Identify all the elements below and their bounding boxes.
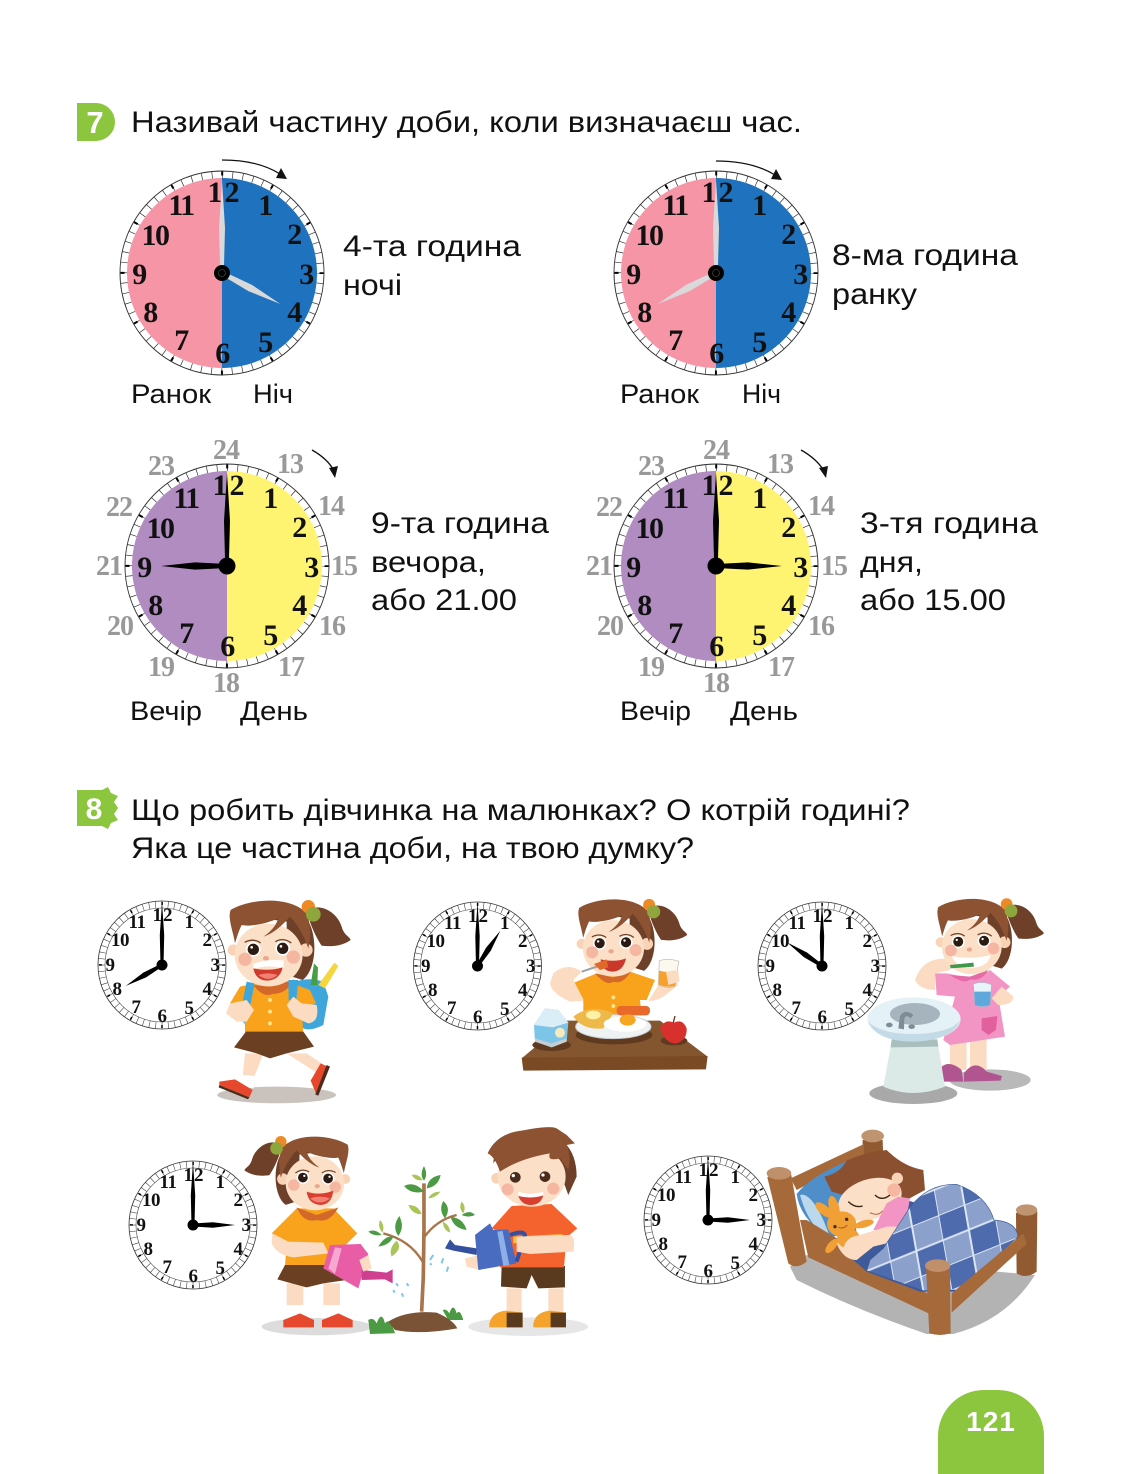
arrow: clockwise 1	[222, 160, 287, 179]
clock: 8 in the morning: 12	[702, 176, 736, 209]
clock: 4 at night: 6	[215, 337, 230, 370]
badge 8: 8	[86, 793, 102, 826]
small clock: 3 o'clock, daytime: 2	[234, 1190, 242, 1211]
labels: evening and day 2: День	[730, 696, 798, 726]
clock: 15 hours: 9	[626, 551, 640, 584]
clock: 15 hours: 21	[586, 551, 612, 582]
small clock: 8 o'clock: 2	[202, 930, 212, 951]
badge 7: 7	[86, 105, 104, 140]
clock: 15 hours: 23	[638, 451, 665, 482]
clock: 15 hours: 22	[596, 492, 622, 523]
illustration: girl sleeping in bed	[767, 1130, 1037, 1335]
small clock: 1 o'clock: 1	[500, 913, 509, 934]
small clock: 10 o'clock: 5	[844, 999, 854, 1020]
clock: 15 hours: 24	[703, 435, 730, 466]
clock: 21 hours: 9	[137, 551, 151, 584]
small clock: 3 o'clock, daytime: 3	[242, 1215, 250, 1236]
clock: 15 hours: 17	[768, 652, 795, 683]
clock: 21 hours	[96, 435, 357, 699]
small clock: 3 o'clock, daytime: 7	[162, 1257, 172, 1278]
small clock: 10 o'clock: 1	[844, 913, 854, 934]
small clock: 3 o'clock, night: 11	[675, 1167, 691, 1188]
small clock: 3 o'clock, daytime: 1	[216, 1172, 224, 1193]
clock: 21 hours: 19	[148, 652, 174, 683]
heading: exercise 8: Яка це частина доби, на твою думку?	[131, 832, 694, 865]
clock: 8 in the morning: 7	[668, 324, 683, 357]
clock: 8 in the morning: 11	[662, 189, 688, 222]
small clock: 1 o'clock: 6	[473, 1007, 482, 1028]
small clock: 8 o'clock: 8	[112, 979, 122, 1000]
clock: 8 in the morning: 4	[781, 296, 796, 329]
clock: 15 hours: 10	[636, 512, 663, 545]
labels: evening and day 2: Вечір	[620, 696, 691, 726]
clock: 15 hours: 19	[638, 652, 664, 683]
small clock: 3 o'clock, night: 9	[652, 1210, 660, 1231]
clock: 21 hours: 14	[318, 491, 345, 522]
small clock: 3 o'clock, daytime: 11	[160, 1172, 176, 1193]
small clock: 8 o'clock	[98, 901, 226, 1029]
small clock: 3 o'clock, daytime: 10	[142, 1190, 160, 1211]
small clock: 3 o'clock, daytime: 5	[216, 1258, 224, 1279]
small clock: 8 o'clock: 3	[210, 955, 220, 976]
arrow: clockwise 3	[312, 450, 338, 478]
labels: evening and day 2	[620, 696, 798, 726]
boy	[507, 1288, 522, 1313]
small clock: 3 o'clock, daytime: 9	[136, 1215, 146, 1236]
clock: 15 hours: 8	[637, 589, 651, 622]
clock: 8 in the morning: 10	[636, 219, 663, 252]
small clock: 10 o'clock: 6	[818, 1007, 826, 1028]
clock: 21 hours: 23	[148, 451, 175, 482]
clock: 15 hours: 4	[781, 589, 796, 622]
bunny toy	[813, 1195, 875, 1257]
small clock: 8 o'clock: 1	[184, 912, 194, 933]
page number tab: 121	[966, 1406, 1016, 1437]
small clock: 3 o'clock, night: 6	[704, 1261, 712, 1282]
small clock: 10 o'clock	[758, 902, 886, 1030]
labels: morning and night 2: Ніч	[742, 379, 781, 409]
clock: 4 at night: 5	[258, 326, 272, 359]
small clock: 8 o'clock: 4	[202, 979, 212, 1000]
clock: 4 at night	[120, 171, 324, 375]
clock: 8 in the morning: 9	[626, 258, 640, 291]
clock: 4 at night: 10	[142, 219, 169, 252]
small clock: 1 o'clock: 3	[526, 956, 535, 977]
clock: 21 hours: 20	[107, 611, 133, 642]
small clock: 8 o'clock: 11	[129, 912, 145, 933]
small clock: 3 o'clock, night: 4	[748, 1234, 758, 1255]
clock: 15 hours: 1	[752, 482, 766, 515]
caption: 3 in the afternoon: або 15.00	[860, 584, 1006, 617]
clock: 8 in the morning	[614, 171, 818, 375]
clock: 15 hours: 15	[821, 551, 847, 582]
girl	[287, 1283, 303, 1307]
small clock: 3 o'clock, night: 7	[678, 1252, 688, 1273]
illustration: girl eating breakfast	[522, 899, 708, 1071]
small clock: 3 o'clock, daytime	[129, 1161, 257, 1289]
pink watering can	[323, 1244, 368, 1288]
arrow: clockwise 2	[716, 161, 782, 180]
tree	[422, 1183, 424, 1312]
small clock: 3 o'clock, night: 2	[748, 1185, 758, 1206]
clock: 21 hours: 4	[292, 589, 307, 622]
small clock: 10 o'clock: 4	[862, 980, 872, 1001]
clock: 15 hours: 7	[668, 617, 683, 650]
clock: 4 at night: 2	[287, 218, 301, 251]
labels: evening and day 1	[130, 696, 308, 726]
heading text 8: Що робить дівчинка на малюнках? О котрій годині?	[131, 794, 910, 827]
clock: 21 hours: 3	[304, 551, 318, 584]
small clock: 3 o'clock, night: 3	[756, 1210, 766, 1231]
small clock: 1 o'clock: 10	[426, 931, 444, 952]
small clock: 1 o'clock: 12	[468, 906, 489, 927]
small clock: 10 o'clock: 10	[771, 931, 789, 952]
clock: 4 at night: 1	[258, 189, 272, 222]
small clock: 1 o'clock: 2	[518, 931, 527, 952]
clock: 21 hours: 5	[263, 619, 277, 652]
clock: 15 hours: 5	[752, 619, 766, 652]
small clock: 10 o'clock: 12	[812, 906, 834, 927]
clock: 21 hours: 11	[173, 482, 199, 515]
clock: 4 at night: 7	[174, 324, 189, 357]
heading: exercise 7	[77, 103, 802, 141]
caption: 8 in the morning: 8-ма година	[832, 239, 1018, 272]
small clock: 1 o'clock: 7	[447, 998, 457, 1019]
clock: 15 hours: 18	[703, 668, 730, 699]
clock: 4 at night: 4	[287, 296, 302, 329]
labels: morning and night 2: Ранок	[620, 379, 699, 409]
clock: 15 hours: 6	[709, 630, 724, 663]
small clock: 1 o'clock: 5	[500, 999, 509, 1020]
caption: 9 in the evening: або 21.00	[371, 584, 517, 617]
small clock: 3 o'clock, night: 10	[657, 1185, 675, 1206]
small clock: 1 o'clock	[414, 902, 542, 1030]
clock: 21 hours: 15	[331, 551, 357, 582]
small clock: 3 o'clock, daytime: 6	[188, 1266, 198, 1287]
small clock: 8 o'clock: 6	[158, 1006, 166, 1027]
heading: exercise 8	[77, 787, 910, 865]
illustration: girl and boy watering a tree	[244, 1127, 588, 1336]
small clock: 10 o'clock: 9	[766, 956, 774, 977]
clock: 15 hours	[586, 435, 847, 699]
clock: 15 hours: 11	[662, 482, 688, 515]
clock: 21 hours: 2	[292, 511, 306, 544]
clock: 21 hours: 6	[220, 630, 235, 663]
arrow: clockwise 4	[801, 450, 828, 478]
small clock: 1 o'clock: 9	[421, 956, 430, 977]
badge 8	[77, 787, 118, 829]
clock: 8 in the morning: 3	[793, 258, 807, 291]
labels: evening and day 1: Вечір	[130, 696, 202, 726]
caption: 4 at night	[343, 230, 521, 302]
caption: 4 at night: ночі	[343, 269, 402, 302]
illustration: girl walking to school	[217, 900, 351, 1103]
illustration: girl brushing teeth at a sink	[867, 898, 1044, 1104]
clock: 8 in the morning: 5	[752, 326, 766, 359]
clock: 4 at night: 9	[132, 258, 146, 291]
clock: 15 hours: 16	[808, 611, 835, 642]
small clock: 3 o'clock, night: 8	[658, 1234, 668, 1255]
clock: 8 in the morning: 1	[752, 189, 766, 222]
clock: 4 at night: 3	[299, 258, 313, 291]
badge 7	[77, 103, 115, 141]
labels: morning and night 1: Ранок	[131, 379, 211, 409]
clock: 21 hours: 22	[106, 492, 132, 523]
clock: 21 hours: 13	[277, 449, 304, 480]
small clock: 8 o'clock: 10	[111, 930, 129, 951]
caption: 8 in the morning: ранку	[832, 278, 917, 311]
small clock: 3 o'clock, night: 5	[730, 1253, 740, 1274]
labels: morning and night 1: Ніч	[253, 379, 293, 409]
clock: 4 at night: 11	[168, 189, 194, 222]
clock: 15 hours: 20	[597, 611, 623, 642]
clock: 21 hours: 18	[213, 668, 240, 699]
caption: 9 in the evening: 9-та година	[371, 507, 549, 540]
clock: 8 in the morning: 2	[781, 218, 795, 251]
caption: 9 in the evening	[371, 507, 549, 617]
clock: 15 hours: 3	[793, 551, 807, 584]
labels: morning and night 2	[620, 379, 781, 409]
clock: 21 hours: 16	[319, 611, 346, 642]
small clock: 8 o'clock: 12	[152, 905, 174, 926]
small clock: 3 o'clock, night: 12	[698, 1160, 720, 1181]
caption: 3 in the afternoon	[860, 507, 1038, 617]
small clock: 1 o'clock: 11	[444, 913, 461, 934]
caption: 3 in the afternoon: дня,	[860, 546, 923, 579]
clock: 4 at night: 8	[143, 296, 157, 329]
labels: evening and day 1: День	[240, 696, 308, 726]
clock: 4 at night: 12	[208, 176, 242, 209]
clock: 21 hours: 7	[179, 617, 194, 650]
caption: 4 at night: 4-та година	[343, 230, 521, 263]
small clock: 1 o'clock: 4	[518, 980, 528, 1001]
clock: 21 hours: 17	[278, 652, 305, 683]
small clock: 10 o'clock: 3	[870, 956, 880, 977]
small clock: 3 o'clock, daytime: 4	[234, 1239, 244, 1260]
clock: 15 hours: 13	[767, 449, 794, 480]
clock: 21 hours: 1	[263, 482, 277, 515]
small clock: 10 o'clock: 11	[789, 913, 805, 934]
small clock: 8 o'clock: 5	[184, 998, 194, 1019]
small clock: 3 o'clock, night	[644, 1156, 772, 1284]
clock: 8 in the morning: 8	[637, 296, 651, 329]
small clock: 3 o'clock, night: 1	[730, 1167, 740, 1188]
clock: 21 hours: 10	[146, 512, 174, 545]
labels: morning and night 1	[131, 379, 293, 409]
caption: 9 in the evening: вечора,	[371, 546, 486, 579]
clock: 21 hours: 24	[213, 435, 240, 466]
clock: 15 hours: 14	[808, 491, 835, 522]
small clock: 3 o'clock, daytime: 12	[184, 1165, 204, 1186]
small clock: 1 o'clock: 8	[428, 980, 437, 1001]
clock: 21 hours: 8	[148, 589, 162, 622]
caption: 8 in the morning	[832, 239, 1018, 311]
clock: 15 hours: 12	[702, 469, 736, 502]
clock: 21 hours: 12	[212, 469, 246, 502]
clock: 15 hours: 2	[781, 511, 795, 544]
small clock: 10 o'clock: 7	[792, 998, 802, 1019]
small clock: 8 o'clock: 7	[132, 997, 142, 1018]
clock: 8 in the morning: 6	[709, 337, 724, 370]
clock: 21 hours: 21	[96, 551, 122, 582]
small clock: 10 o'clock: 2	[862, 931, 872, 952]
small clock: 3 o'clock, daytime: 8	[144, 1239, 152, 1260]
small clock: 8 o'clock: 9	[106, 955, 114, 976]
heading text 7: Називай частину доби, коли визначаєш час.	[131, 106, 802, 139]
page number tab	[938, 1390, 1044, 1474]
caption: 3 in the afternoon: 3-тя година	[860, 507, 1038, 540]
small clock: 10 o'clock: 8	[772, 980, 782, 1001]
